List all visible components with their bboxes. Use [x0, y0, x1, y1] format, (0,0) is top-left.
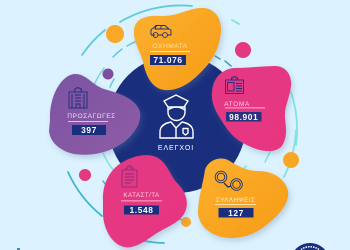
panel: detentions — [49, 74, 140, 155]
icon: car — [151, 26, 171, 37]
underline — [68, 120, 108, 123]
panel: persons — [212, 66, 291, 151]
decorative dot: orange bottom — [181, 217, 191, 227]
blob: purple — [49, 74, 140, 155]
icon: id card — [226, 77, 244, 94]
label: vehicles: ΟΧΗΜΑΤΑ — [152, 43, 188, 50]
decorative dot: pink top right — [235, 42, 251, 58]
decorative dot: orange right — [283, 152, 299, 168]
underline — [121, 200, 162, 202]
panel: reports — [103, 155, 187, 247]
icon: handcuffs — [215, 171, 242, 190]
value: reports: 1.548 — [130, 205, 153, 215]
label: detentions: ΠΡΟΣΑΓΩΓΕΣ — [67, 113, 116, 120]
blob: orange top — [134, 8, 221, 90]
blob: pink bottom left — [103, 155, 187, 247]
icon: building — [69, 88, 87, 108]
small teal mark at bottom left — [17, 248, 20, 250]
underline — [215, 203, 256, 206]
value: detentions: 397 — [81, 125, 97, 135]
value: arrests: 127 — [228, 208, 244, 218]
decorative dot: orange top — [106, 25, 124, 43]
blob: orange bottom — [198, 158, 288, 238]
icon: clipboard — [122, 166, 137, 187]
orbit arcs — [68, 5, 297, 243]
panel: vehicles — [134, 8, 221, 90]
value: vehicles: 71.076 — [153, 55, 183, 65]
decorative dot: pink left — [79, 169, 91, 181]
label: arrests: ΣΥΛΛΗΨΕΙΣ — [216, 197, 255, 204]
label: persons: ΑΤΟΜΑ — [224, 101, 250, 108]
underline — [225, 106, 265, 109]
label: reports: ΚΑΤΑΣΤ/ΤΑ — [123, 192, 160, 199]
logo: badge cropped at bottom right — [295, 243, 325, 250]
heading: checks: ΕΛΕΓΧΟΙ — [158, 145, 194, 152]
icon: police officer — [160, 95, 193, 138]
blob: pink right — [212, 66, 291, 151]
central navy circle — [108, 55, 246, 193]
panel: arrests — [198, 158, 288, 238]
center: officer and heading — [158, 95, 194, 152]
decorative dot: purple — [102, 68, 114, 80]
value: persons: 98.901 — [229, 112, 258, 122]
underline — [150, 50, 190, 53]
